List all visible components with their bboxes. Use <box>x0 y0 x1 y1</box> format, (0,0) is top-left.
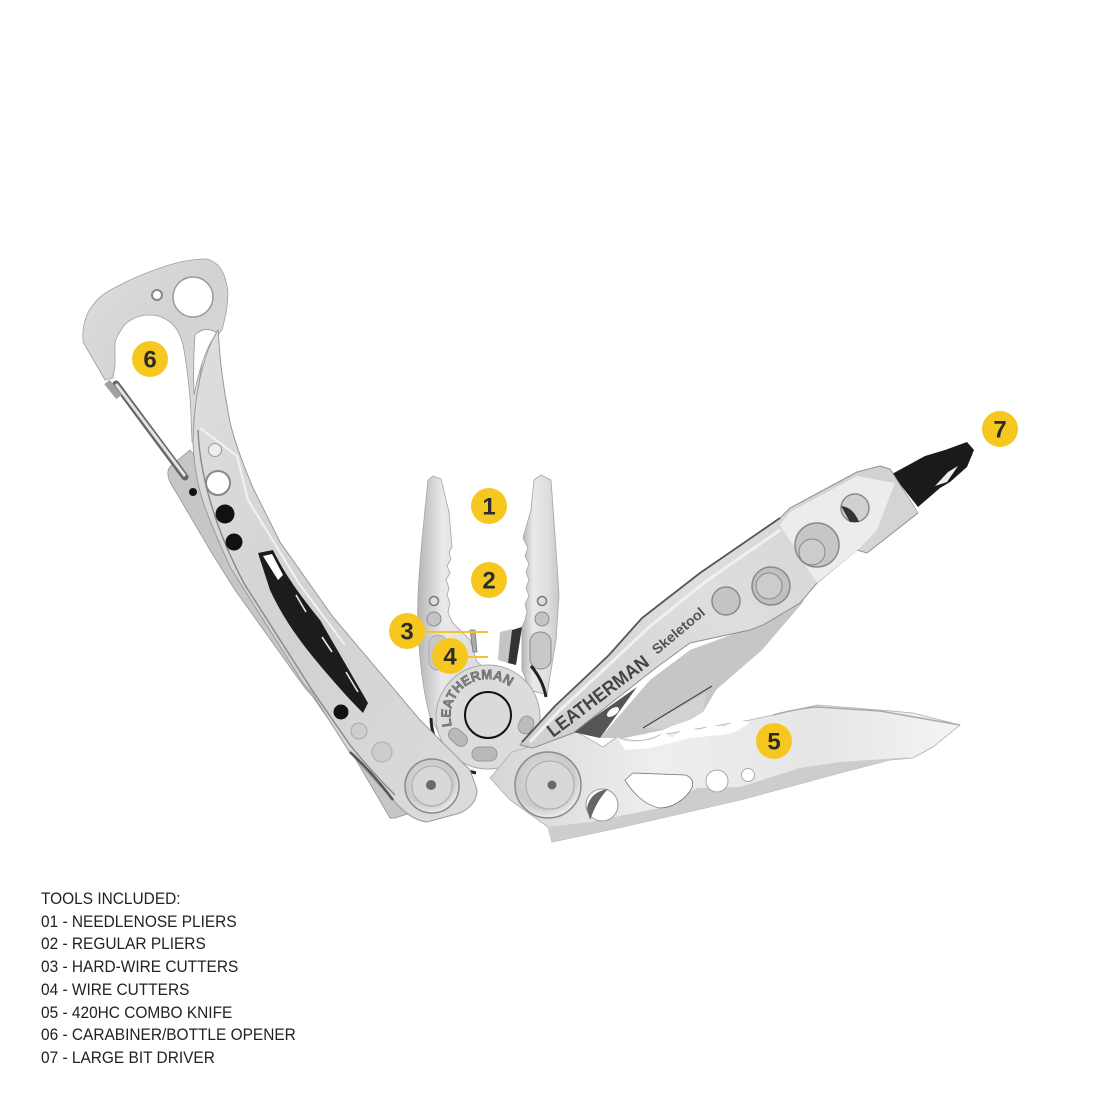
badge 6 <box>132 341 168 377</box>
underside blade plate <box>600 600 805 738</box>
tools list: 06 - CARABINER/BOTTLE OPENER <box>41 1025 296 1044</box>
carabiner body <box>83 259 228 442</box>
badge 4: 4 <box>443 644 457 670</box>
medallion text: LEATHERMAN <box>440 670 514 727</box>
tools list: 02 - REGULAR PLIERS <box>41 934 206 953</box>
right jaw <box>522 475 559 695</box>
carabiner holes <box>173 277 213 317</box>
left jaw <box>418 476 500 735</box>
handle holes <box>712 587 740 615</box>
handle body <box>520 466 918 748</box>
pivot screw left <box>405 759 459 813</box>
knife serrations <box>617 720 750 750</box>
tools list <box>41 889 296 1067</box>
tool: carabiner handle <box>83 259 477 822</box>
badge 2: 2 <box>482 568 496 594</box>
tools list: 05 - 420HC COMBO KNIFE <box>41 1003 232 1022</box>
tools list: 04 - WIRE CUTTERS <box>41 980 189 999</box>
badge 1: 1 <box>482 494 496 520</box>
pivot medallion <box>436 664 540 770</box>
engraved model text: Skeletool <box>649 604 708 657</box>
engraved brand text: LEATHERMAN <box>543 652 653 742</box>
tools list: 07 - LARGE BIT DRIVER <box>41 1048 215 1067</box>
back plate <box>168 450 420 818</box>
badge 5: 5 <box>767 728 781 756</box>
badge 6: 6 <box>143 346 157 374</box>
shadow arcs behind medallion <box>431 666 546 773</box>
handle slot <box>258 550 368 713</box>
black bit <box>892 442 974 507</box>
knife lower edge bevel <box>548 757 913 842</box>
jaw holes <box>430 596 438 606</box>
tool: knife blade <box>490 705 960 842</box>
badge 7: 7 <box>993 416 1007 444</box>
badge 5 <box>756 723 792 759</box>
tool: bit driver handle <box>520 442 974 748</box>
pivot screw right <box>515 752 581 818</box>
badge 1 <box>471 488 507 524</box>
badge 4 <box>432 638 468 674</box>
badge 3: 3 <box>400 618 414 646</box>
callout leader lines <box>420 632 488 657</box>
handle holes <box>208 444 222 456</box>
main handle plate <box>193 330 477 822</box>
badge 7 <box>982 411 1018 447</box>
tools list: 03 - HARD-WIRE CUTTERS <box>41 957 238 976</box>
badge 3 <box>389 613 425 649</box>
badge 2 <box>471 562 507 598</box>
tool: pliers <box>417 474 560 774</box>
tools list: TOOLS INCLUDED: <box>41 889 181 908</box>
wire cutters <box>498 629 512 663</box>
carabiner wire gate <box>107 382 185 477</box>
tools list: 01 - NEEDLENOSE PLIERS <box>41 912 237 931</box>
knife holes <box>625 773 693 808</box>
